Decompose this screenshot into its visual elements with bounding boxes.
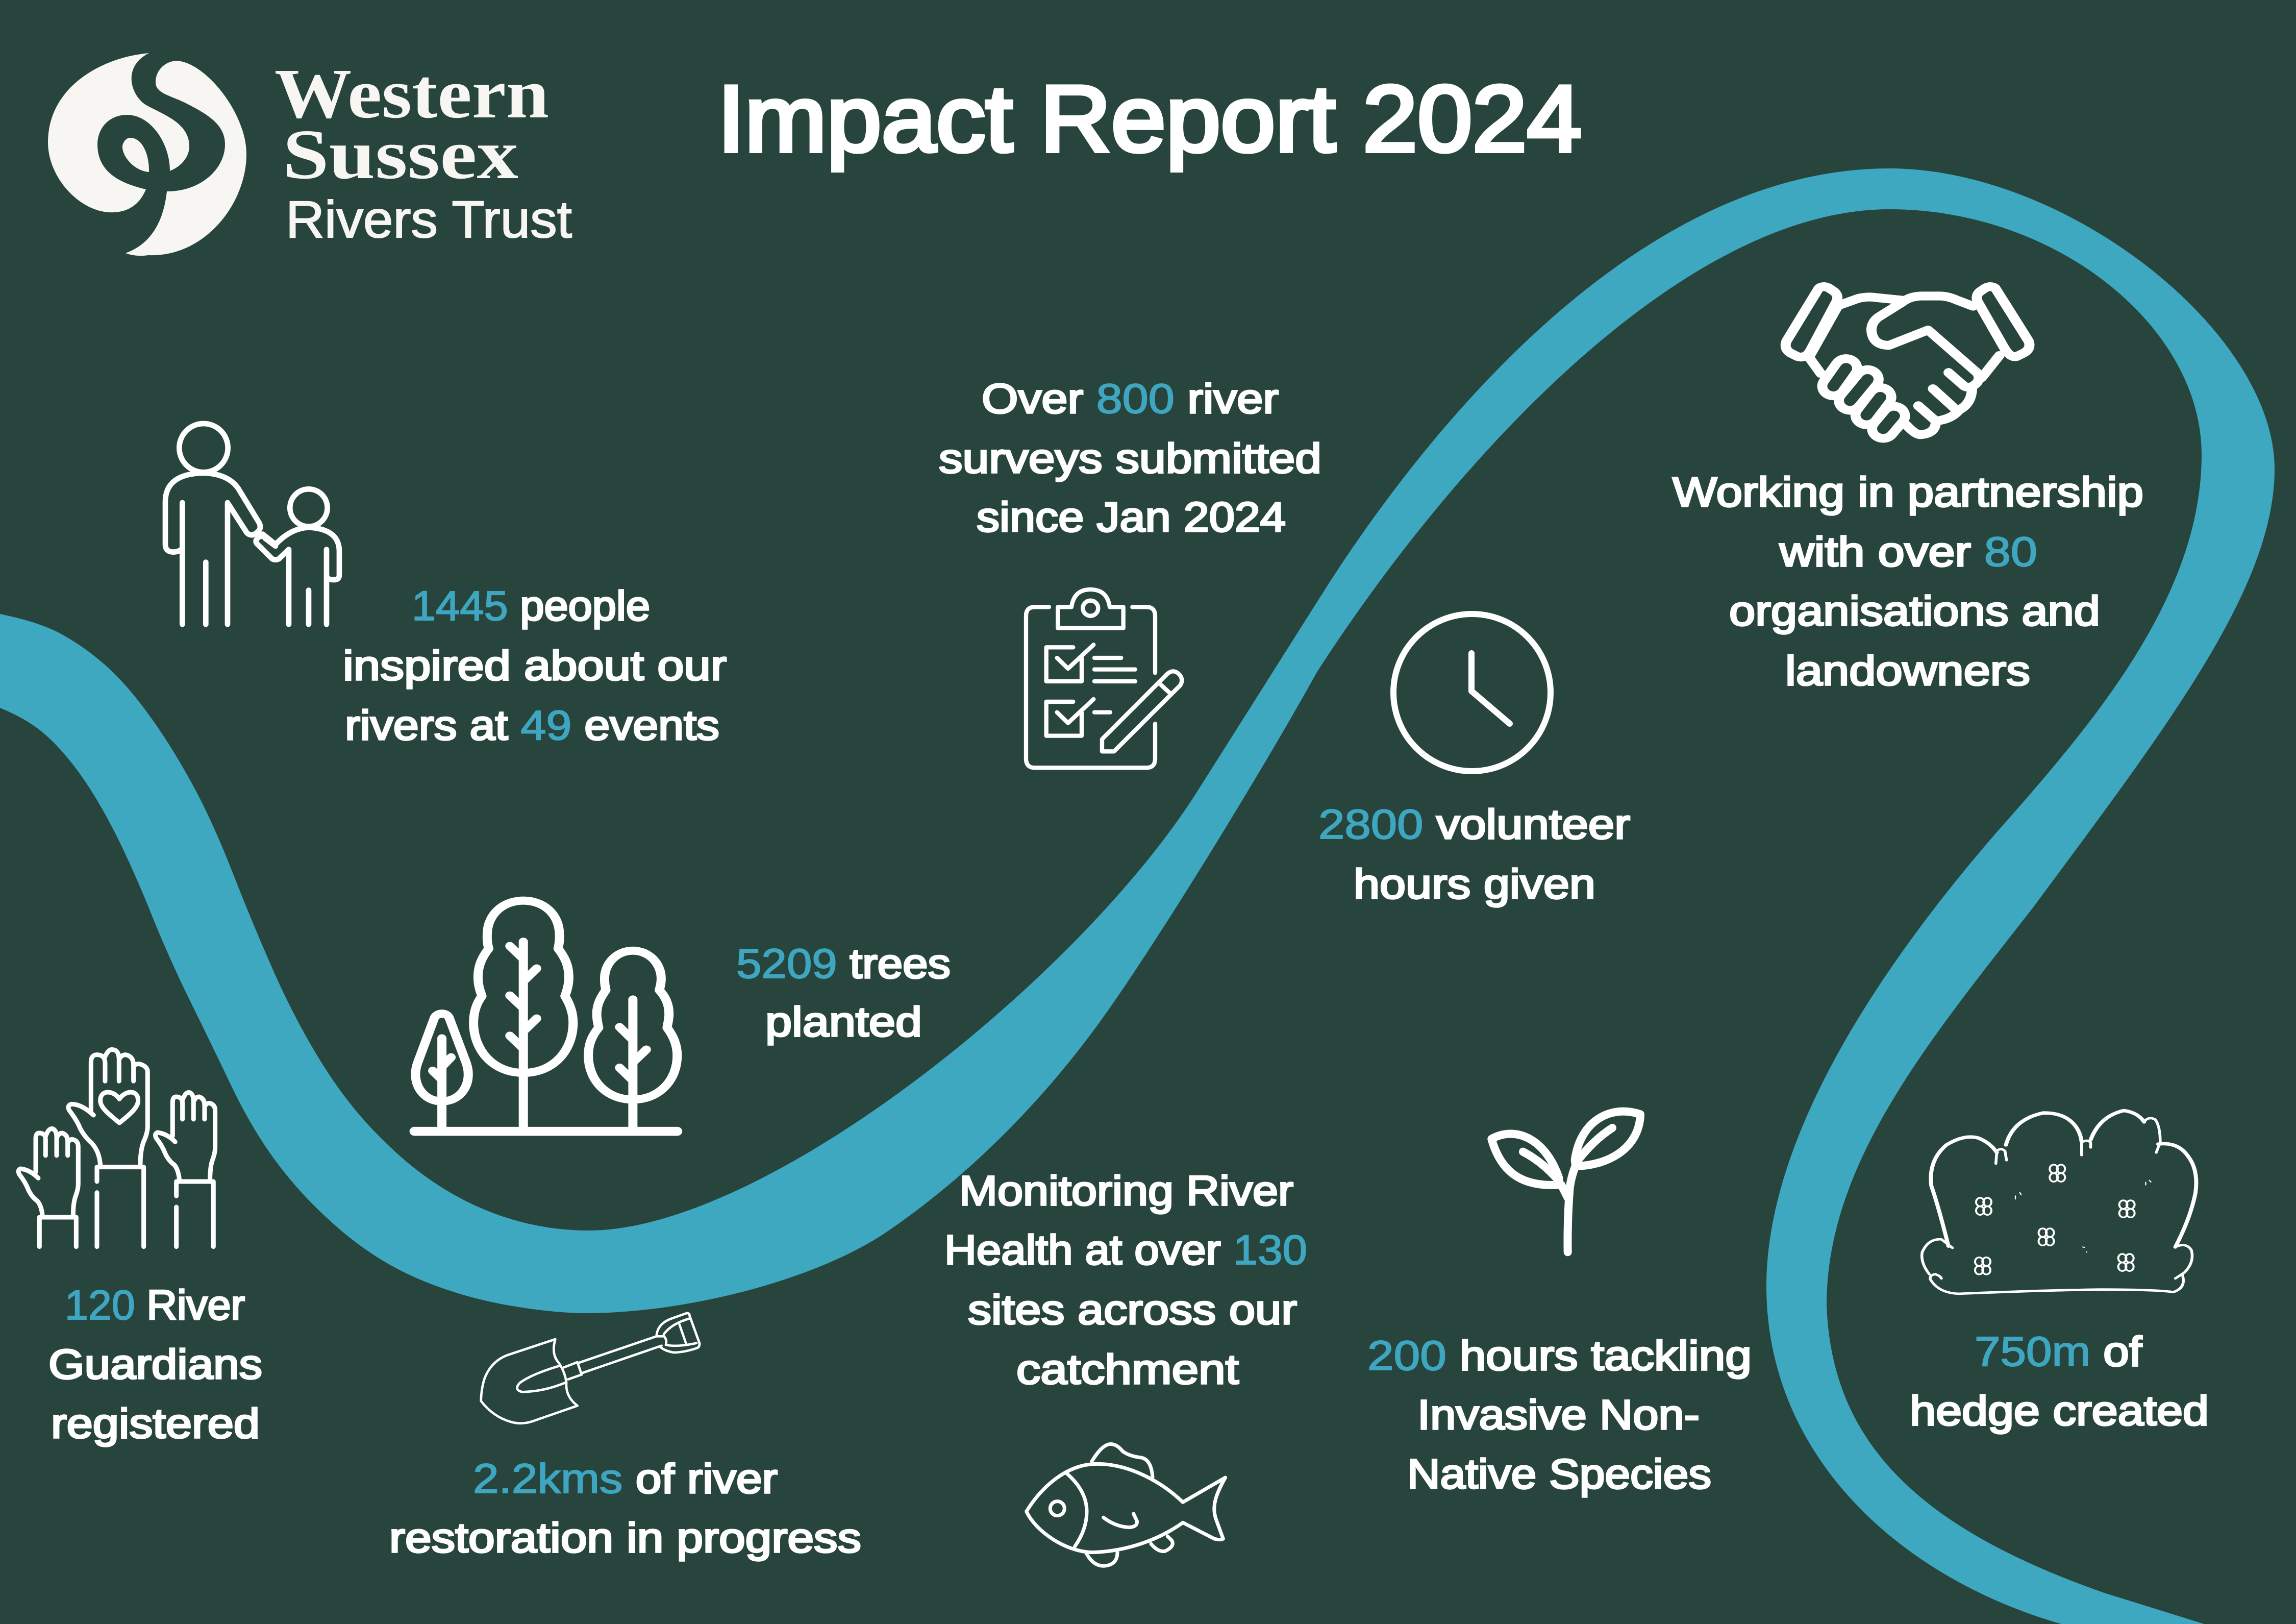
icon: sprout [1491,1112,1640,1252]
text: river surveys: surveys submitted [939,435,1321,482]
panel: river surveys [939,376,1321,768]
logo wordmark: Rivers Trust [286,190,572,249]
text: invasive species: Native Species [1407,1451,1711,1497]
text: river surveys: Over 800 river [982,376,1279,422]
text: volunteer hours [1318,801,1630,907]
icon: handshake [1786,287,2030,435]
text: invasive species: Invasive Non- [1417,1392,1700,1438]
text: invasive species [1367,1333,1752,1497]
text: river surveys [939,376,1321,540]
icon: clipboard [1026,589,1182,768]
text: river guardians: Guardians [48,1341,262,1388]
logo: Western Sussex Rivers Trust [48,53,572,256]
text: invasive species: 200 hours tackling [1367,1333,1752,1379]
text: river health monitoring [944,1168,1307,1393]
panel: volunteer hours [1318,614,1630,907]
title: Impact Report 2024 [717,66,1582,171]
text: river restoration: 2.2kms of river [473,1456,778,1502]
text: river restoration: restoration in progress [389,1515,861,1561]
text: partnership: landowners [1785,648,2030,694]
text: partnership: with over 80 [1779,529,2037,575]
logo mark [48,53,246,256]
text: hedge created: 750m of [1975,1328,2142,1375]
icon: raised hands [18,1049,215,1247]
text: partnership [1673,469,2143,694]
text: hedge created: hedge created [1910,1388,2209,1434]
icon: trees [415,901,677,1131]
text: river health monitoring: Monitoring River [959,1168,1293,1214]
text: river guardians [48,1282,262,1447]
logo wordmark: Sussex [283,115,518,194]
logo wordmark: Western [274,55,549,133]
icon: adult and child [165,424,339,624]
text: river health monitoring: sites across our [968,1287,1297,1333]
text: river health monitoring: Health at over 130 [944,1227,1307,1273]
text: people inspired: rivers at 49 events [345,702,719,749]
text: partnership: Working in partnership [1673,469,2143,515]
text: trees planted: 5209 trees [736,941,951,987]
text: people inspired: inspired about our [343,643,727,689]
text: trees planted [736,941,951,1045]
text: people inspired: 1445 people [412,583,650,629]
icon: clock [1393,614,1551,771]
panel: people inspired [165,424,727,749]
text: volunteer hours: hours given [1354,861,1595,907]
panel: river restoration [389,1313,861,1561]
panel: river guardians [18,1049,262,1447]
icon: hedge [1922,1111,2196,1294]
panel: partnership [1673,287,2143,694]
text: river guardians: registered [51,1400,260,1447]
panel: river health monitoring [944,1168,1307,1566]
panel: trees planted [415,901,951,1131]
text: hedge created [1910,1328,2209,1434]
text: partnership: organisations and [1729,588,2100,634]
text: volunteer hours: 2800 volunteer [1318,801,1630,848]
text: people inspired [343,583,727,749]
text: river restoration [389,1456,861,1561]
icon: fish [1027,1444,1226,1566]
icon: shovel [481,1313,700,1423]
panel: invasive species [1367,1112,1752,1497]
text: river guardians: 120 River [65,1282,245,1328]
logo wordmark [274,55,572,249]
panel: hedge created [1910,1111,2209,1434]
text: river health monitoring: catchment [1016,1346,1239,1393]
text: river surveys: since Jan 2024 [977,494,1286,540]
text: trees planted: planted [765,999,922,1045]
